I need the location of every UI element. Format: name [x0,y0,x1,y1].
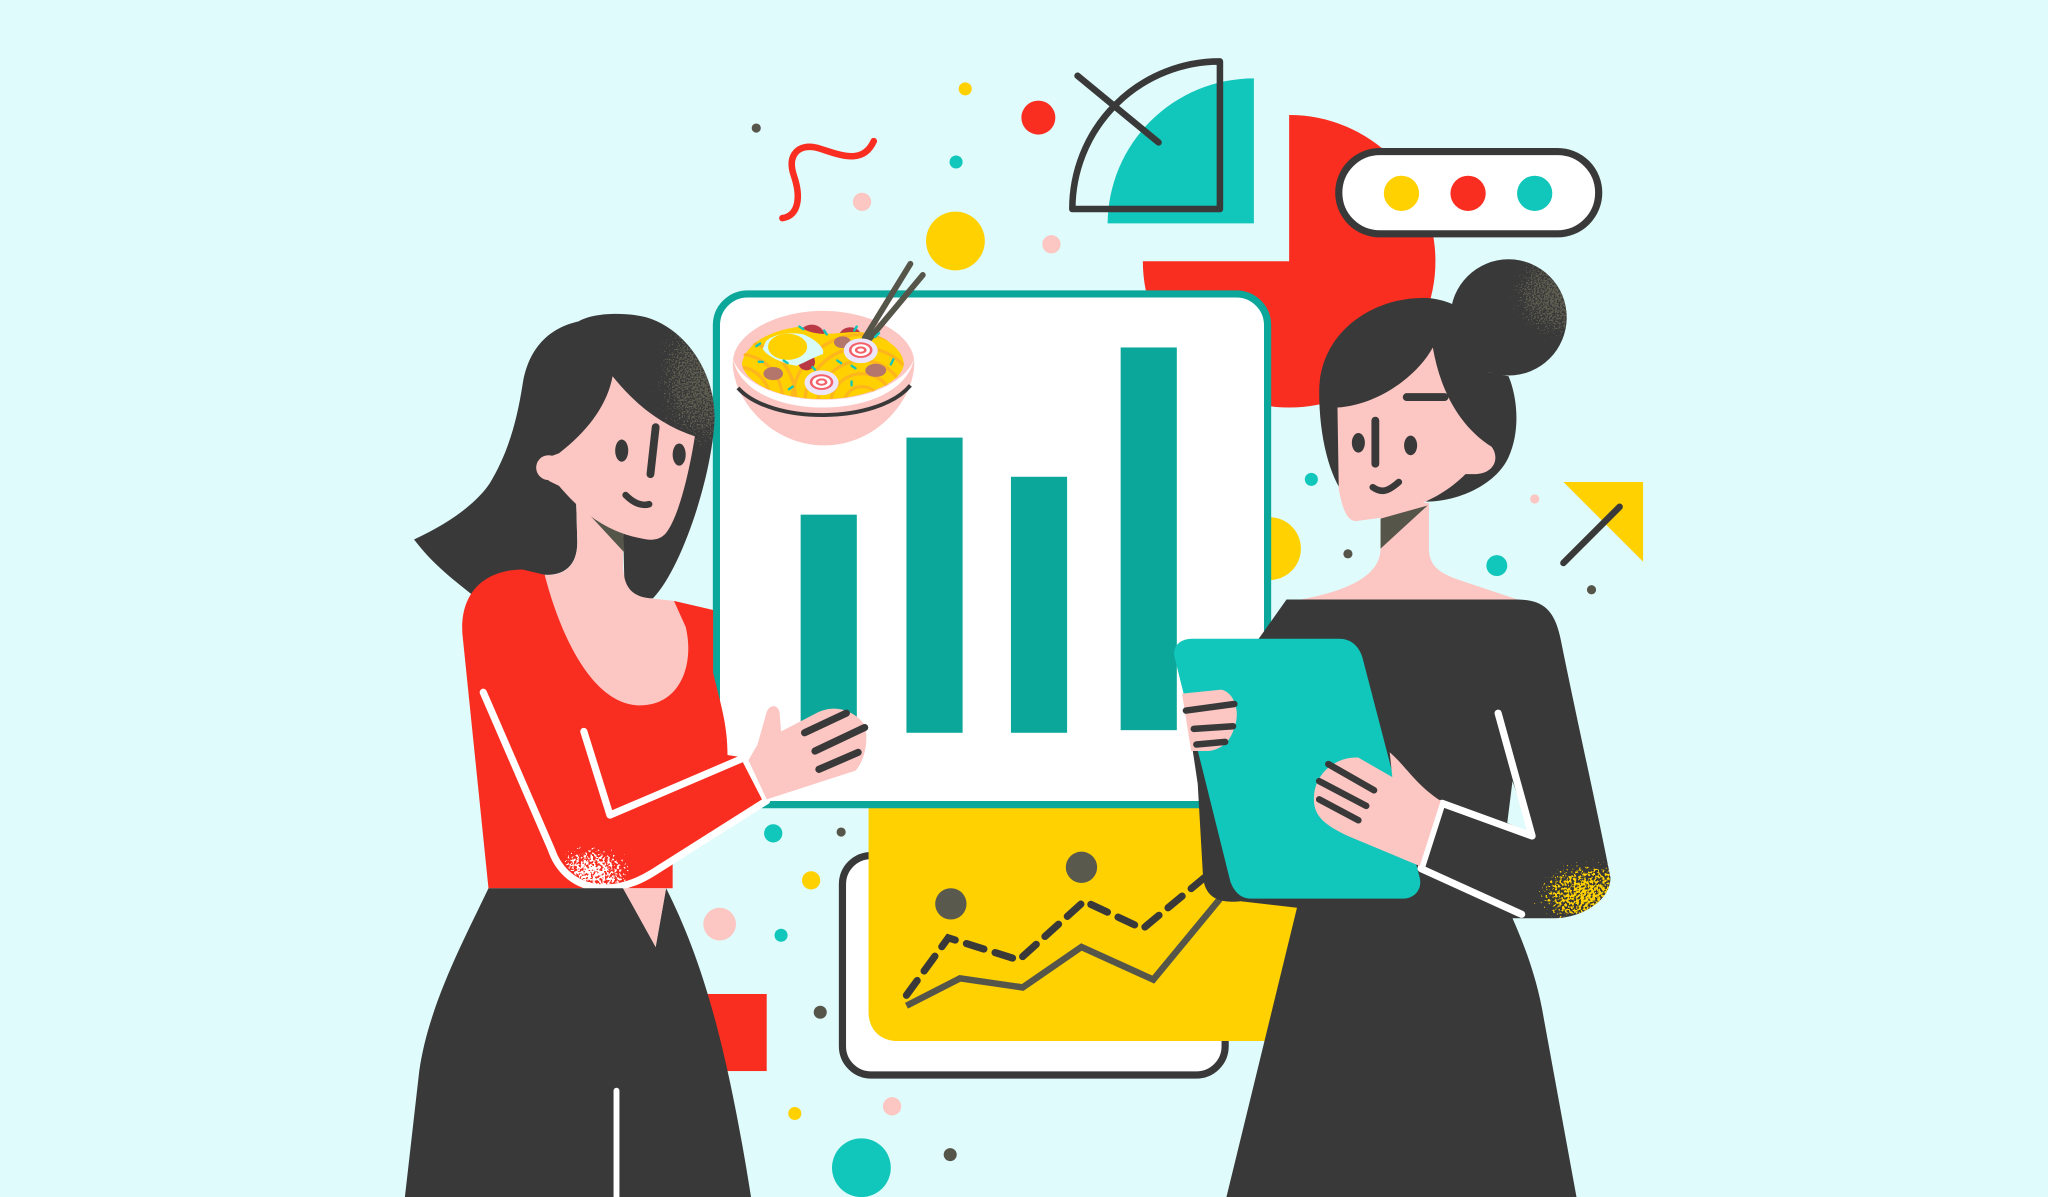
confetti dots: lower [703,824,957,1197]
dress [1182,600,1610,1197]
bun shading [1510,262,1567,338]
red top [462,570,767,888]
hair bun [1450,259,1567,376]
outlined card behind line chart [842,856,1225,1075]
nose [1372,421,1378,464]
solid chart line [906,897,1221,1006]
arrow icon [1563,482,1643,563]
tablet [1174,639,1420,899]
hand [748,706,866,799]
meatballs [763,336,886,380]
sleeve lines [483,692,767,888]
mouth [626,495,649,505]
dashed chart line [906,878,1204,995]
lower sausage [798,353,815,370]
face [1337,347,1495,521]
skirt [405,888,751,1197]
red pie chart [1143,115,1435,408]
yellow circle behind board [1238,517,1301,580]
icon: noodle bowl [732,260,926,446]
egg [763,333,823,366]
narutomaki left [805,370,839,395]
eyes [615,440,686,466]
line chart card [869,803,1306,1041]
sleeve speckle [565,846,631,884]
chart markers [935,852,1097,920]
bars [801,347,1177,733]
outlined quarter pie with cross line [1072,61,1220,209]
neck and shoulders [1293,503,1522,601]
woman right [1174,244,1642,1197]
soup [742,327,904,399]
sleeve lines [1421,713,1532,914]
pill with three colour dots [1339,152,1599,234]
fingers [805,713,865,769]
hair [1319,298,1516,502]
hair [414,314,714,598]
arm gap [1507,781,1531,833]
hand on tablet left [1182,690,1237,751]
neck and chest [545,496,688,705]
scallions [756,327,893,389]
woman left [405,300,866,1197]
ear [536,455,561,480]
sausage slices [798,325,863,354]
skirt waist gap [623,888,666,947]
mouth [1373,482,1399,491]
red squiggle [782,141,874,218]
fingers left [1186,704,1234,745]
hair shading [652,332,714,452]
red square behind skirt [705,994,767,1071]
neck shadow [1381,506,1428,549]
nose [650,427,656,474]
confetti dots: top [752,82,1061,270]
hair clip [1407,394,1445,400]
bowl body [733,311,914,445]
face [549,376,695,540]
noodles [742,332,904,399]
eyes [1352,433,1417,455]
teal quarter pie [1108,78,1254,223]
bar chart board [716,294,1268,805]
confetti dots: right [1305,473,1596,594]
neck shadow [576,500,624,553]
bowl rim [733,358,914,408]
skirt fold [614,1091,619,1196]
narutomaki right [844,338,878,363]
chopsticks [865,264,923,338]
sleeve speckle [1534,860,1610,918]
illustration: two women reviewing charts [404,58,1644,1197]
hand on tablet right [1314,752,1441,866]
bowl stripe [738,385,910,415]
fingers right [1319,764,1374,820]
